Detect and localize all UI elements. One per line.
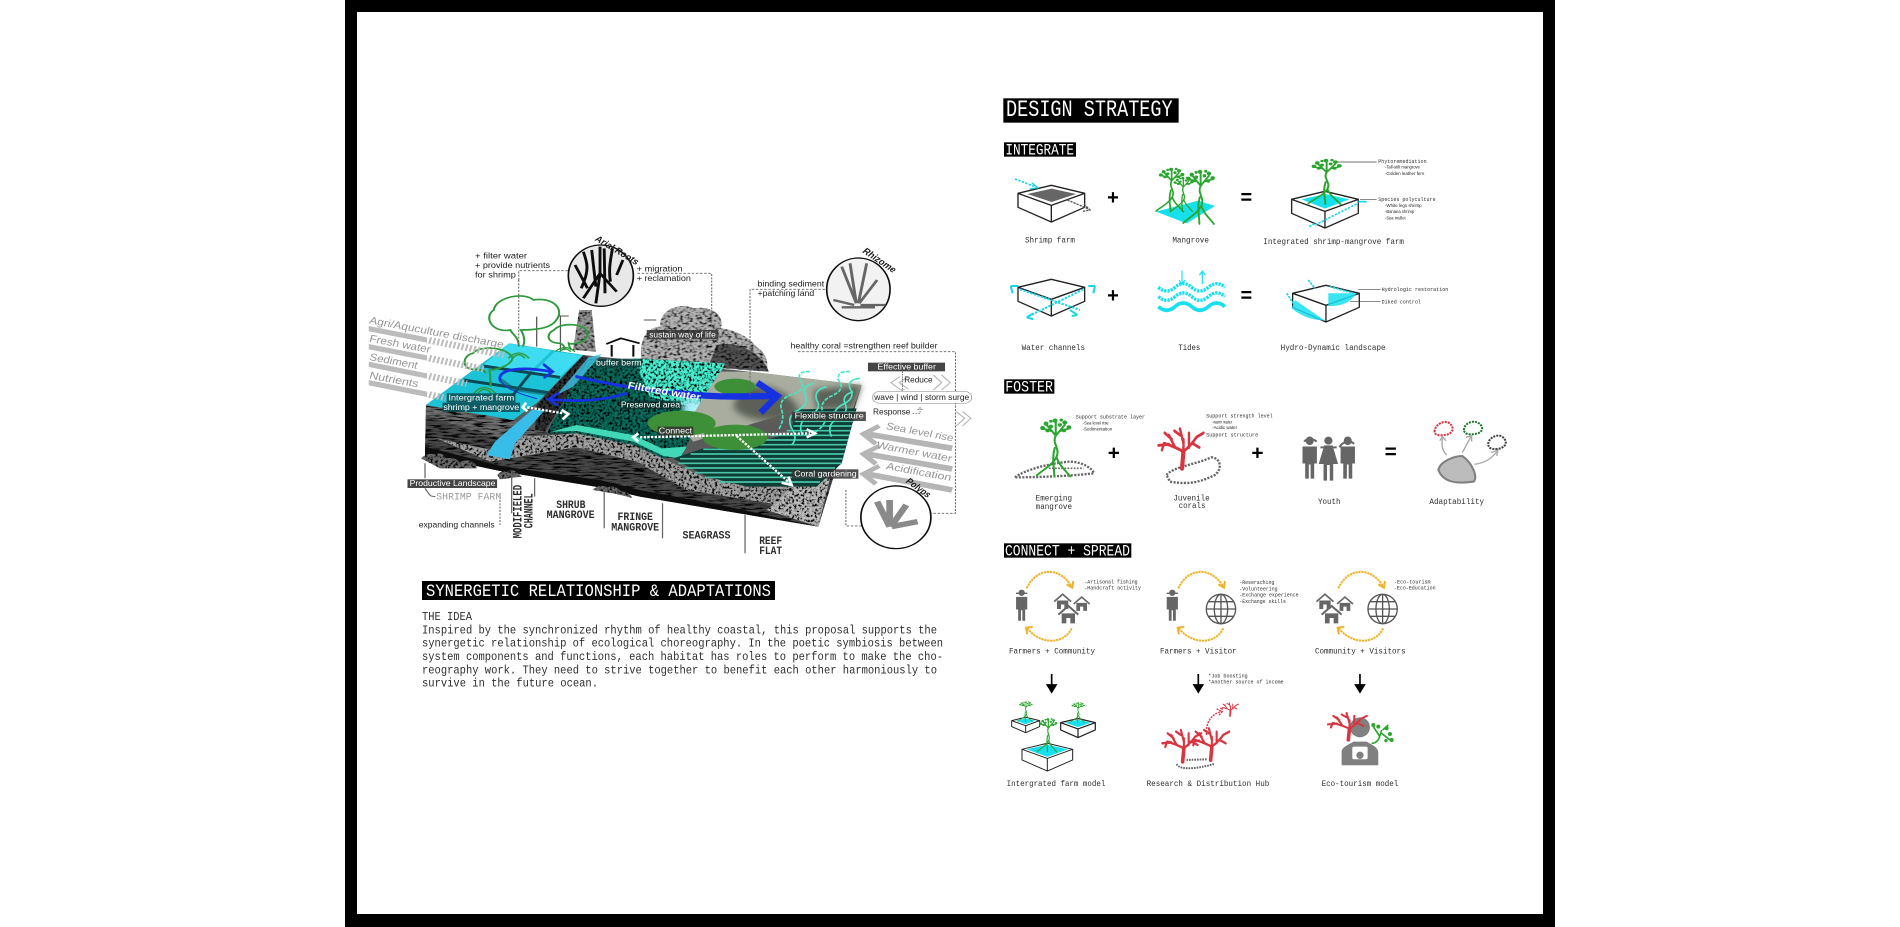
label: flexible structure: Flexible structure bbox=[795, 411, 864, 420]
label: reef flat: FLAT bbox=[759, 545, 782, 558]
callout: species polyculture: -White legs shrimp bbox=[1385, 203, 1422, 208]
icon: youth group bbox=[1303, 437, 1355, 481]
label: seagrass: SEAGRASS bbox=[683, 529, 730, 542]
icon: juvenile coral bbox=[1159, 429, 1220, 483]
label: juvenile corals: Juvenile bbox=[1173, 493, 1210, 503]
label: shrub mangrove bbox=[547, 499, 595, 522]
callout: species polyculture: Species polyculture bbox=[1378, 197, 1436, 203]
label: preserved area: Preserved area bbox=[621, 399, 681, 409]
arrow: down to eco-tourism bbox=[1356, 674, 1364, 692]
reef and seagrass zone bbox=[673, 372, 862, 487]
annotation: migration and reclamation bbox=[637, 264, 691, 284]
label: sea level rise: Sea level rise bbox=[885, 421, 955, 444]
icon: tides bbox=[1158, 271, 1225, 310]
annotation: healthy coral: healthy coral =strengthen reef builder bbox=[790, 342, 938, 351]
annotation: binding sediment: binding sediment bbox=[758, 280, 824, 289]
label: fringe mangrove: MANGROVE bbox=[611, 521, 659, 534]
seagrass patches bbox=[648, 379, 768, 450]
label: Polyps: Polyps bbox=[903, 477, 934, 500]
label: acidification: Acidification bbox=[885, 461, 953, 484]
label: farmers + community: Farmers + Community bbox=[1009, 647, 1095, 657]
text block: the idea: Inspired by the synchronized rhythm of healthy coastal, this proposal supports the bbox=[422, 624, 937, 638]
label: filtered water: Filtered water bbox=[626, 381, 702, 403]
label: coral gardening: Coral gardening bbox=[794, 468, 857, 478]
rocks along base bbox=[421, 454, 633, 498]
label: mangrove: Mangrove bbox=[1172, 235, 1209, 245]
callout: effective buffer and response: Reduce bbox=[904, 375, 933, 384]
label: modified channel: MODIFIELED bbox=[513, 485, 526, 538]
annotation: binding sediment bbox=[758, 280, 824, 299]
modified channel bbox=[487, 354, 602, 459]
icon: shrimp farm box bbox=[1015, 179, 1090, 222]
mangrove forest bbox=[547, 358, 725, 458]
panel: ecosystem block diagram annotations bbox=[368, 234, 972, 558]
icon: hydro-dynamic box bbox=[1287, 280, 1359, 322]
equals sign: = bbox=[1240, 285, 1252, 307]
arrow: down to research hub bbox=[1194, 674, 1203, 692]
text block: the idea: reography work. They need to strive together to benefit each other harmoniously to bbox=[422, 664, 937, 677]
label: agri discharge: Agri/Aquculture discharge bbox=[368, 315, 505, 351]
note: job boosting: *Another source of income bbox=[1208, 680, 1284, 686]
terrain side section bbox=[425, 385, 862, 527]
label: reef flat bbox=[759, 535, 782, 558]
note: researching: -Volunteering bbox=[1239, 586, 1278, 592]
label: nutrients: Nutrients bbox=[368, 370, 420, 390]
note: artisanal fishing: -Handcraft activity bbox=[1084, 586, 1142, 592]
label: reef flat: REEF bbox=[759, 535, 782, 548]
label: modified channel: CHANNEL bbox=[524, 493, 537, 528]
equals sign: = bbox=[1240, 187, 1252, 209]
callout: species polyculture: -Sea mullet bbox=[1385, 215, 1406, 220]
label: shrimp farm: Shrimp farm bbox=[1025, 235, 1075, 245]
incoming pressures: right gray arrows bbox=[863, 375, 971, 490]
zone divider lines bbox=[425, 463, 745, 553]
inset: rhizome bbox=[827, 247, 899, 321]
label: integrated shrimp-mangrove farm: Integrated shrimp-mangrove farm bbox=[1263, 237, 1404, 247]
note: researching: -Exchange skills bbox=[1239, 599, 1286, 605]
cycle: farmers and community bbox=[1016, 572, 1090, 641]
arrow: down to farm model bbox=[1047, 674, 1056, 692]
black frame bbox=[345, 0, 1555, 927]
label: fringe mangrove bbox=[611, 511, 659, 534]
label: sediment: Sediment bbox=[368, 351, 420, 372]
cycle: community and visitors bbox=[1316, 572, 1397, 641]
label: integrated farm bbox=[443, 393, 520, 412]
note: job boosting bbox=[1208, 673, 1284, 686]
label: integrated farm model: Intergrated farm model bbox=[1007, 779, 1105, 789]
callout: phytoremediation bbox=[1337, 159, 1427, 200]
heading: design strategy: DESIGN STRATEGY bbox=[1006, 97, 1173, 123]
callout: effective buffer and response bbox=[868, 362, 972, 416]
label: modified channel bbox=[513, 485, 537, 538]
label: youth: Youth bbox=[1318, 497, 1340, 507]
label: emerging mangrove bbox=[1036, 494, 1072, 512]
label: eco-tourism model: Eco-tourism model bbox=[1322, 779, 1398, 789]
white connection arrows bbox=[527, 407, 810, 482]
shrimp farm plots bbox=[426, 343, 583, 420]
callout: effective buffer and response: Response bbox=[873, 406, 910, 416]
note: job boosting: *Job boosting bbox=[1208, 673, 1248, 679]
icon: integrated farm box bbox=[1292, 159, 1367, 228]
callout: support substrate layer: -Sedimentation bbox=[1083, 427, 1113, 432]
text block: the idea: THE IDEA bbox=[422, 611, 472, 624]
label: shrimp farm: SHRIMP FARM bbox=[436, 492, 501, 503]
note: artisanal fishing: -Artisonal fishing bbox=[1084, 579, 1138, 585]
annotation: filter water benefits bbox=[475, 251, 550, 280]
dashed leader lines bbox=[500, 271, 955, 526]
incoming pressures: left gray arrows bbox=[368, 315, 505, 398]
label: tides: Tides bbox=[1178, 343, 1200, 353]
annotation: filter water benefits: + provide nutrients bbox=[475, 261, 550, 271]
heading: synergetic relationship: SYNERGETIC RELATIONSHIP & ADAPTATIONS bbox=[426, 582, 771, 602]
label: integrated farm: Intergrated farm bbox=[448, 393, 514, 402]
text block: the idea bbox=[422, 611, 943, 691]
label: research and distribution hub: Research & Distribution Hub bbox=[1147, 779, 1269, 789]
plus sign: + bbox=[1107, 285, 1119, 307]
heading: connect + spread: CONNECT + SPREAD bbox=[1005, 542, 1130, 560]
label: emerging mangrove: Emerging bbox=[1036, 494, 1072, 504]
icon: eco-tourism model bbox=[1328, 713, 1394, 765]
label: fringe mangrove: FRINGE bbox=[618, 511, 653, 524]
panel: connect and spread bbox=[1004, 542, 1436, 789]
filtered water flow arrows bbox=[500, 365, 777, 413]
callout: hydrologic restoration bbox=[1350, 287, 1448, 305]
note: eco-tourism bbox=[1394, 579, 1436, 592]
terrain block bbox=[421, 343, 862, 527]
note: eco-tourism: -Eco-tourism bbox=[1394, 579, 1431, 585]
label: emerging mangrove: mangrove bbox=[1036, 502, 1072, 512]
panel: foster bbox=[1004, 379, 1506, 512]
note: artisanal fishing bbox=[1084, 579, 1142, 592]
callout: support substrate layer: Support substrate layer bbox=[1076, 413, 1145, 420]
note: researching: -Exchange experience bbox=[1239, 593, 1299, 599]
note: eco-tourism: -Eco-Education bbox=[1394, 586, 1436, 592]
label: connect: Connect bbox=[659, 426, 692, 435]
callout: effective buffer and response: Effective buffer bbox=[878, 362, 936, 371]
callout: support strength level bbox=[1206, 413, 1273, 438]
inset: aerial roots bbox=[568, 234, 642, 306]
callout: species polyculture bbox=[1378, 197, 1436, 220]
text block: the idea: system components and functions, each habitat has roles to perform to make the cho- bbox=[422, 651, 943, 664]
callout: species polyculture: -Banana shrimp bbox=[1385, 209, 1415, 214]
callout: effective buffer and response: wave | wind | storm surge bbox=[873, 392, 969, 402]
label: warmer water: Warmer water bbox=[875, 440, 953, 464]
annotation: filter water benefits: + filter water bbox=[475, 251, 528, 261]
annotation: filter water benefits: for shrimp bbox=[475, 271, 516, 280]
callout: support strength level: -Acidic water bbox=[1212, 425, 1238, 430]
label: shrub mangrove: SHRUB bbox=[556, 499, 585, 512]
mangrove outline trees bbox=[465, 296, 588, 393]
label: juvenile corals bbox=[1173, 493, 1210, 511]
terrain underlay bbox=[425, 343, 862, 527]
heading: foster: FOSTER bbox=[1005, 379, 1053, 396]
inset: polyps bbox=[861, 477, 934, 549]
plus sign: + bbox=[1108, 443, 1120, 464]
label: sustain way of life: sustain way of life bbox=[649, 329, 716, 339]
callout: support strength level: Support strength level bbox=[1206, 413, 1273, 420]
label: adaptability: Adaptability bbox=[1429, 497, 1484, 507]
icon: integrated farm model bbox=[1012, 701, 1095, 771]
callout: phytoremediation: -Golden leather fern bbox=[1385, 171, 1425, 176]
label: Arial Roots: Arial Roots bbox=[592, 234, 642, 267]
label: hydro-dynamic landscape: Hydro-Dynamic landscape bbox=[1281, 343, 1386, 353]
background trees and house bbox=[537, 306, 769, 372]
text block: the idea: synergetic relationship of ecological choreography. In the poetic symbiosis between bbox=[422, 638, 943, 651]
icon: emerging mangrove bbox=[1015, 418, 1094, 477]
cycle: farmers and visitor bbox=[1167, 572, 1236, 641]
icon: water channels box bbox=[1011, 279, 1095, 319]
note: researching: -Reseraching bbox=[1239, 580, 1274, 586]
callout: support substrate layer bbox=[1076, 413, 1145, 432]
icon: mangrove grove bbox=[1156, 168, 1215, 224]
icon: research and distribution hub bbox=[1162, 703, 1239, 768]
annotation: migration and reclamation: + migration bbox=[637, 264, 683, 274]
text block: the idea: survive in the future ocean. bbox=[422, 678, 598, 691]
callout: support strength level: Support structure bbox=[1206, 431, 1259, 438]
label: water channels: Water channels bbox=[1022, 343, 1085, 353]
callout: hydrologic restoration: Diked control bbox=[1382, 299, 1421, 305]
callout: phytoremediation: -Tall-stilt mangrove bbox=[1385, 165, 1421, 170]
label: buffer berm: buffer berm bbox=[596, 358, 642, 367]
label: Rhizome: Rhizome bbox=[860, 247, 899, 275]
label: productive landscape: Productive Landscape bbox=[410, 479, 495, 488]
plus sign: + bbox=[1251, 443, 1264, 464]
label: shrub mangrove: MANGROVE bbox=[547, 509, 595, 522]
flexible coral structures bbox=[778, 372, 860, 445]
label: expanding channels: expanding channels bbox=[419, 520, 495, 529]
annotation: migration and reclamation: + reclamation bbox=[637, 274, 691, 284]
plus sign: + bbox=[1107, 187, 1119, 209]
equals sign: = bbox=[1385, 442, 1397, 464]
icon: adaptability bbox=[1435, 422, 1506, 483]
callout: phytoremediation: Phytoremediation bbox=[1378, 159, 1427, 165]
label: farmers + visitor: Farmers + Visitor bbox=[1160, 647, 1237, 657]
label: community + visitors: Community + Visitors bbox=[1315, 646, 1406, 656]
callout: support substrate layer: -Sea level rise bbox=[1083, 420, 1109, 425]
heading: integrate: INTEGRATE bbox=[1005, 142, 1074, 160]
callout: support strength level: -warm water bbox=[1212, 419, 1233, 424]
annotation: binding sediment: +patching land bbox=[758, 289, 814, 299]
panel: design strategy, integrate bbox=[1003, 97, 1448, 353]
label: fresh water: Fresh water bbox=[368, 333, 432, 356]
callout: hydrologic restoration: Hydrologic restoration bbox=[1382, 287, 1448, 293]
label: juvenile corals: corals bbox=[1179, 501, 1206, 511]
note: researching bbox=[1239, 580, 1299, 605]
label: integrated farm: shrimp + mangrove bbox=[443, 402, 519, 412]
